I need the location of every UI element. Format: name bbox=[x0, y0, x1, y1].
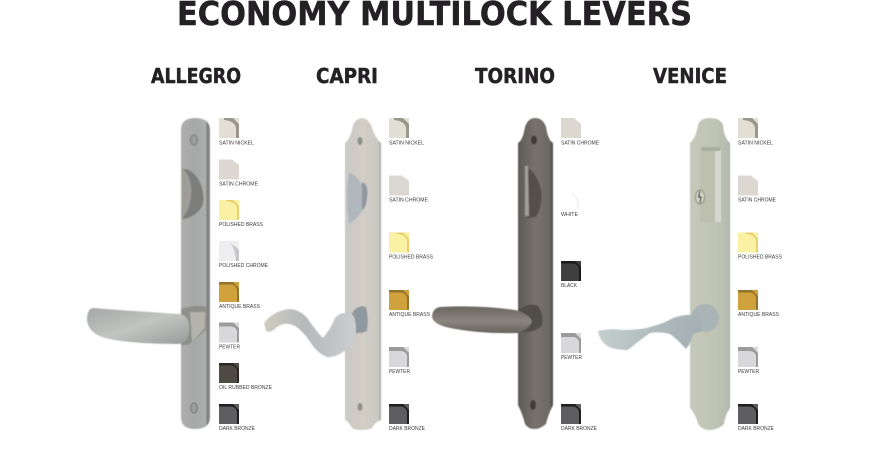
swatch: satin chrome: SATIN CHROME bbox=[561, 140, 599, 146]
rose bbox=[691, 304, 719, 332]
swatch: polished brass bbox=[389, 232, 433, 260]
swatch: dark bronze bbox=[389, 404, 425, 432]
swatch: pewter bbox=[738, 347, 759, 375]
swatch: satin nickel: SATIN NICKEL bbox=[738, 140, 773, 146]
swatch: polished chrome: POLISHED CHROME bbox=[219, 263, 268, 269]
swatch: white bbox=[561, 190, 581, 218]
swatch: satin chrome bbox=[219, 160, 258, 188]
screw holes bbox=[530, 136, 537, 410]
swatch: polished brass bbox=[219, 200, 263, 228]
heading: Torino: TORINO bbox=[475, 64, 555, 88]
swatch: satin chrome bbox=[738, 176, 776, 204]
swatch: antique brass: ANTIQUE BRASS bbox=[738, 312, 779, 318]
rose bbox=[181, 306, 206, 345]
swatch: black bbox=[561, 261, 581, 289]
swatch: satin chrome: SATIN CHROME bbox=[219, 182, 258, 188]
handle bbox=[432, 306, 532, 333]
swatches: Allegro bbox=[219, 118, 272, 432]
handle bbox=[598, 315, 701, 350]
heading: Allegro: ALLEGRO bbox=[151, 64, 241, 88]
heading: Venice: VENICE bbox=[653, 64, 727, 88]
lever: Capri bbox=[264, 118, 381, 430]
plate bbox=[690, 118, 730, 430]
plate bbox=[181, 118, 210, 429]
swatch: black: BLACK bbox=[561, 283, 577, 289]
swatch: pewter: PEWTER bbox=[738, 369, 759, 375]
swatch: oil rubbed bronze bbox=[219, 363, 272, 391]
swatch: satin nickel: SATIN NICKEL bbox=[219, 140, 254, 146]
swatch: dark bronze bbox=[219, 404, 255, 432]
swatch: pewter: PEWTER bbox=[219, 344, 240, 350]
swatch: polished brass bbox=[738, 232, 782, 260]
swatch: oil rubbed bronze: OIL RUBBED BRONZE bbox=[219, 385, 272, 391]
rose bbox=[352, 306, 368, 333]
swatch: dark bronze: DARK BRONZE bbox=[738, 426, 774, 432]
swatch: polished brass: POLISHED BRASS bbox=[738, 254, 782, 260]
rose bbox=[518, 305, 542, 332]
swatch: polished brass: POLISHED BRASS bbox=[389, 254, 433, 260]
swatches: Capri bbox=[389, 118, 433, 432]
swatch: satin chrome: SATIN CHROME bbox=[389, 198, 428, 204]
screw holes bbox=[190, 135, 198, 413]
swatch: antique brass: ANTIQUE BRASS bbox=[389, 312, 430, 318]
swatch: satin nickel bbox=[738, 118, 773, 146]
swatch: pewter: PEWTER bbox=[389, 369, 410, 375]
swatches: Torino bbox=[561, 118, 599, 432]
swatch: pewter bbox=[561, 333, 582, 361]
swatch: antique brass bbox=[219, 282, 260, 310]
thumb piece bbox=[527, 168, 541, 218]
swatch: satin chrome bbox=[389, 176, 428, 204]
heading: Capri: CAPRI bbox=[316, 64, 378, 88]
swatch: dark bronze: DARK BRONZE bbox=[219, 426, 255, 432]
swatch: pewter bbox=[219, 322, 240, 350]
swatch: white: WHITE bbox=[561, 212, 578, 218]
handle bbox=[264, 309, 356, 357]
thumb turn bbox=[347, 173, 366, 224]
cylinder box bbox=[700, 147, 720, 222]
swatch: dark bronze bbox=[738, 404, 774, 432]
handle bbox=[87, 308, 189, 344]
swatch: pewter bbox=[389, 347, 410, 375]
swatch: satin chrome: SATIN CHROME bbox=[738, 198, 776, 204]
swatch: antique brass bbox=[738, 290, 779, 318]
swatches: Venice bbox=[738, 118, 782, 432]
keyhole bbox=[696, 190, 704, 204]
swatch: dark bronze bbox=[561, 404, 597, 432]
swatch: pewter: PEWTER bbox=[561, 355, 582, 361]
screw holes bbox=[358, 137, 362, 411]
plate bbox=[518, 118, 553, 429]
swatch: antique brass bbox=[389, 290, 430, 318]
swatch: antique brass: ANTIQUE BRASS bbox=[219, 304, 260, 310]
swatch: dark bronze: DARK BRONZE bbox=[389, 426, 425, 432]
lever: Venice bbox=[598, 118, 730, 430]
swatch: polished chrome bbox=[219, 241, 268, 269]
swatch: satin chrome bbox=[561, 118, 599, 146]
thumb turn bbox=[182, 169, 204, 219]
swatch: dark bronze: DARK BRONZE bbox=[561, 426, 597, 432]
lever: Torino bbox=[432, 118, 553, 429]
swatch: polished brass: POLISHED BRASS bbox=[219, 222, 263, 228]
lever: Allegro bbox=[87, 118, 210, 429]
swatch: satin nickel bbox=[219, 118, 254, 146]
plate bbox=[345, 118, 381, 430]
swatch: satin nickel: SATIN NICKEL bbox=[389, 140, 424, 146]
swatch: satin nickel bbox=[389, 118, 424, 146]
